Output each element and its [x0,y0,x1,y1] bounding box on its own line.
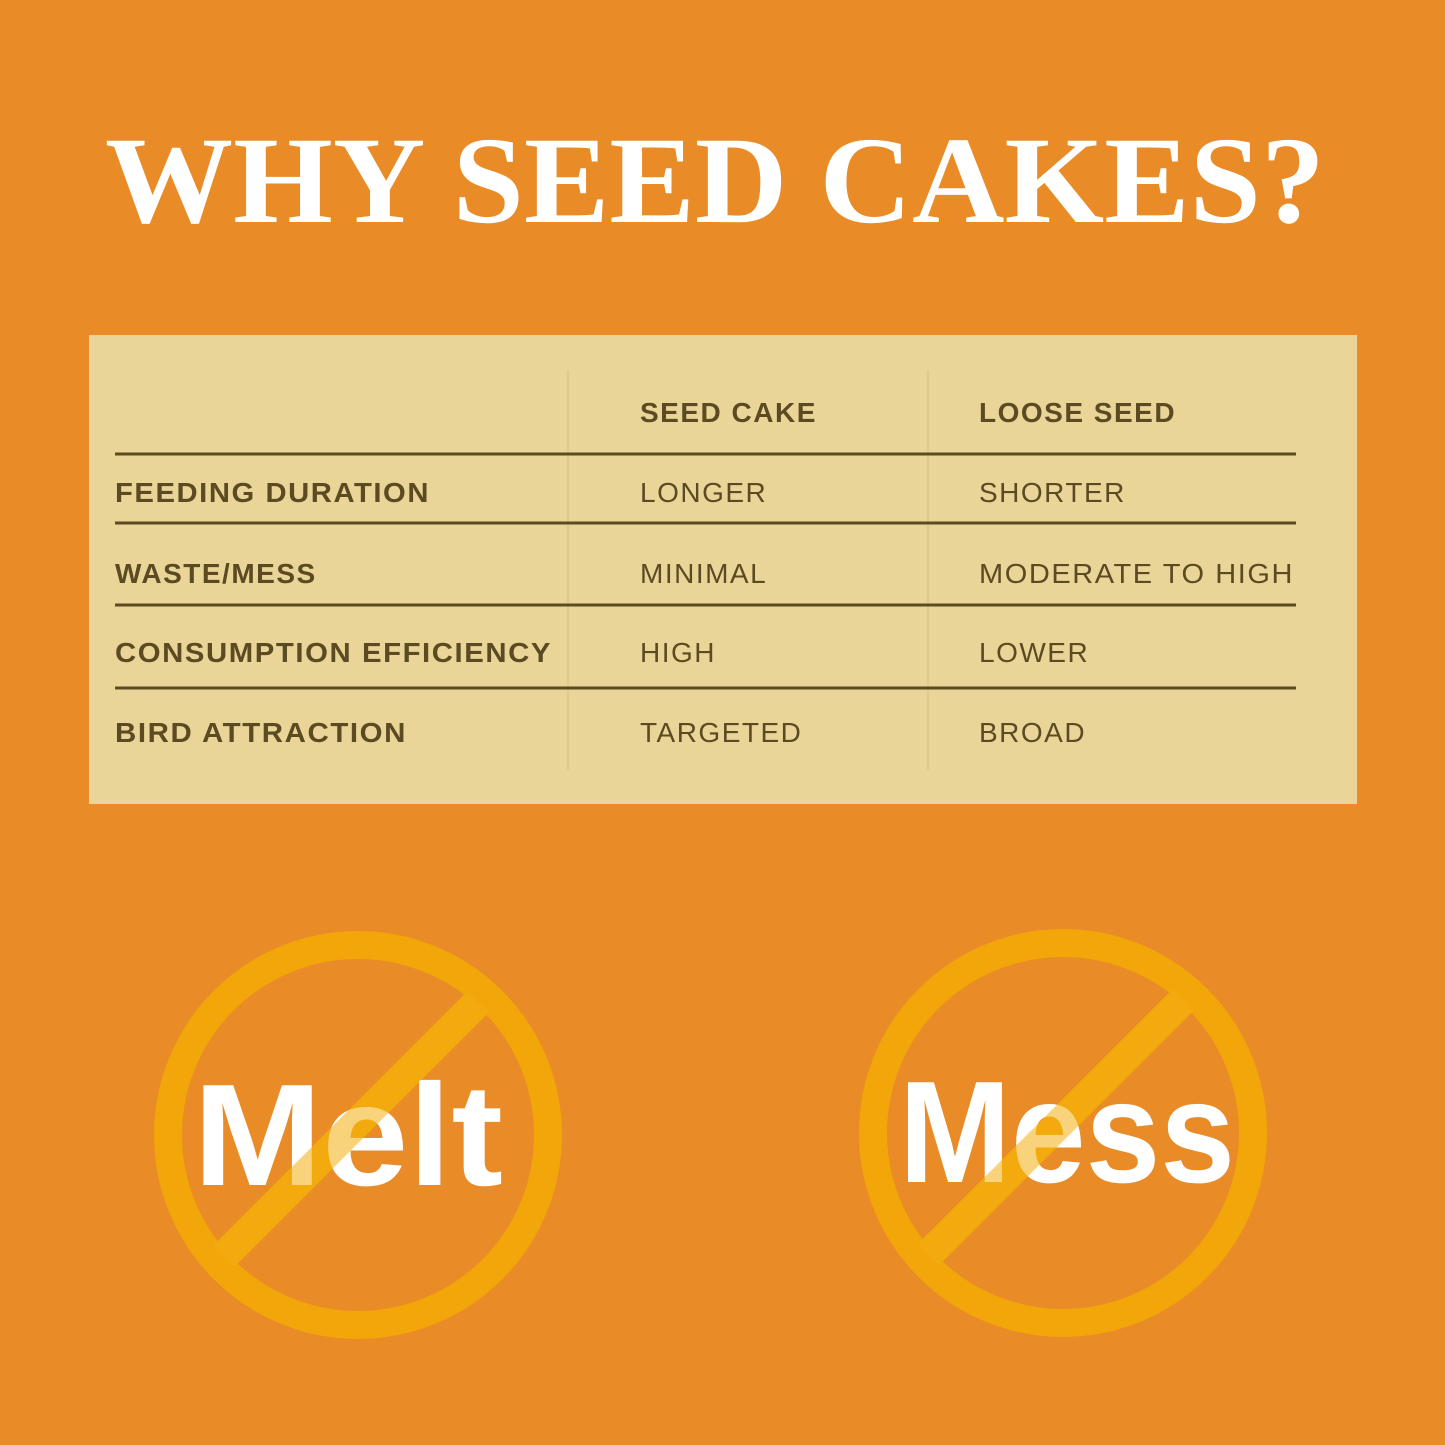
panel: comparison table [89,335,1357,804]
title: WHY SEED CAKES? [105,112,1325,249]
table header: LOOSE SEED [979,397,1176,428]
table rows: SHORTER [979,477,1126,508]
table rows [115,477,1294,748]
icon: no melt [168,945,548,1325]
table rows: LONGER [640,477,767,508]
icon: no mess: Mess [899,1051,1235,1213]
icon: no mess [873,943,1253,1323]
icon: no melt: Melt [193,1054,503,1216]
table rows: MINIMAL [640,558,767,589]
table rows: CONSUMPTION EFFICIENCY [115,637,552,668]
table header [640,397,1176,428]
table rows: MODERATE TO HIGH [979,558,1294,589]
table rows: HIGH [640,637,716,668]
table rows: WASTE/MESS [115,558,317,589]
table rows: LOWER [979,637,1089,668]
table rows: FEEDING DURATION [115,477,430,508]
table rows: BROAD [979,717,1086,748]
table header: SEED CAKE [640,397,817,428]
table rows: BIRD ATTRACTION [115,717,407,748]
table rows: TARGETED [640,717,802,748]
